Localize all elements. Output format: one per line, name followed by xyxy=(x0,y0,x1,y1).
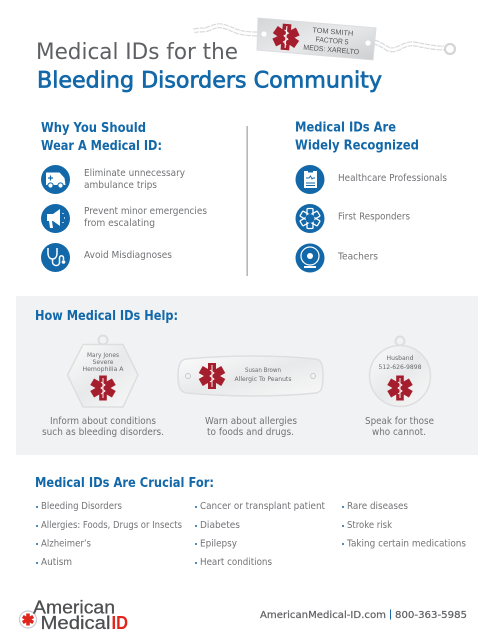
text: teachers: Teachers xyxy=(337,252,378,262)
star of life xyxy=(90,376,116,400)
metal plate xyxy=(257,18,376,60)
star of life xyxy=(199,363,225,389)
heading: Wear A Medical ID: xyxy=(41,139,162,154)
bar tag: Susan Brown xyxy=(245,367,281,374)
text: emergencies: from escalating xyxy=(84,218,155,229)
round tag: Husband xyxy=(386,355,414,362)
round tag: 512-626-9898 xyxy=(378,364,422,371)
icon: star outline xyxy=(296,204,324,233)
text: first responders: First Responders xyxy=(338,212,410,222)
list: column 1: Bleeding Disorders xyxy=(41,501,122,512)
text: ambulance trips: Eliminate unnecessary xyxy=(84,168,185,179)
list: column 2: Cancer or transplant patient xyxy=(200,501,325,512)
heading: Medical IDs Are Crucial For: xyxy=(35,475,214,491)
hexagon tag: Severe xyxy=(92,360,114,366)
logo: american medical id: American xyxy=(33,598,115,618)
star of life xyxy=(387,376,413,400)
hexagon tag: Mary Jones xyxy=(87,353,119,359)
plate engraving: MEDS: XARELTO xyxy=(303,43,360,56)
list: column 1: Autism xyxy=(41,557,72,568)
caption: inform xyxy=(42,416,164,438)
text: emergencies xyxy=(84,206,207,229)
logo: american medical id: Medical xyxy=(40,613,110,633)
list: column 3: Stroke risk xyxy=(347,520,392,531)
panel: why you should wear a medical id xyxy=(41,121,207,272)
chain: left xyxy=(194,26,260,34)
text: emergencies: Prevent minor emergencies xyxy=(84,206,207,217)
caption: speak xyxy=(365,416,434,438)
footer contact: AmericanMedical-ID.com xyxy=(260,610,386,621)
bullet markers xyxy=(36,506,344,564)
list: column 3: Taking certain medications xyxy=(346,538,466,550)
heading: Widely Recognized xyxy=(295,138,419,154)
text: ambulance trips xyxy=(84,168,185,191)
round tag xyxy=(370,336,430,406)
heading: Why You Should xyxy=(41,121,146,136)
list: column 2 xyxy=(200,501,325,568)
plate engraving: FACTOR 5 xyxy=(315,35,349,46)
caption: warn: to foods and drugs. xyxy=(207,427,294,438)
heading xyxy=(41,121,162,154)
footer contact: 800-363-5985 xyxy=(395,610,467,621)
plate star of life xyxy=(272,23,300,51)
icon: stethoscope xyxy=(41,243,70,272)
bar tag xyxy=(178,356,323,396)
list: column 2: Heart conditions xyxy=(200,557,272,568)
logo: american medical id xyxy=(20,598,128,633)
caption: speak: Speak for those xyxy=(365,416,434,427)
bar tag: Allergic To Peanuts xyxy=(234,376,292,383)
text: misdiagnoses: Avoid Misdiagnoses xyxy=(84,250,172,261)
footer contact xyxy=(260,610,467,621)
title xyxy=(36,40,382,94)
plate engraving xyxy=(303,25,362,56)
title: Medical IDs for the xyxy=(36,40,238,65)
icon: clipboard xyxy=(296,165,324,194)
list: column 3: Rare diseases xyxy=(347,501,408,512)
plate engraving: TOM SMITH xyxy=(312,25,354,38)
bracelet illustration xyxy=(194,18,455,60)
list: column 1: Allergies: Foods, Drugs or Insects xyxy=(41,520,182,531)
title: Bleeding Disorders Community xyxy=(37,68,382,94)
logo: american medical id: ID xyxy=(112,613,128,633)
list: column 1 xyxy=(41,501,182,568)
list: column 3 xyxy=(346,501,466,550)
panel: how medical ids help xyxy=(16,296,478,455)
text: healthcare: Healthcare Professionals xyxy=(338,173,447,184)
list: column 2: Epilepsy xyxy=(200,538,237,550)
panel: medical ids are crucial for xyxy=(35,475,466,568)
text: ambulance trips: ambulance trips xyxy=(84,180,157,191)
caption: speak: who cannot. xyxy=(372,427,426,438)
icon: school bell xyxy=(296,244,324,272)
icon: megaphone xyxy=(41,204,70,233)
hexagon tag: Hemophilia A xyxy=(82,367,124,373)
list: column 1: Alzheimer’s xyxy=(41,538,91,550)
list: column 2: Diabetes xyxy=(200,520,240,531)
heading: How Medical IDs Help: xyxy=(35,308,178,324)
panel: medical ids are widely recognized xyxy=(295,120,447,272)
caption: inform: such as bleeding disorders. xyxy=(42,427,164,438)
caption: warn xyxy=(205,416,297,438)
caption: warn: Warn about allergies xyxy=(205,416,297,427)
heading xyxy=(295,120,419,154)
caption: inform: Inform about conditions xyxy=(50,416,156,427)
icon: ambulance xyxy=(41,165,70,194)
heading: Medical IDs Are xyxy=(295,120,396,136)
hexagon tag xyxy=(68,336,138,407)
chain: right with clasp xyxy=(374,42,455,54)
